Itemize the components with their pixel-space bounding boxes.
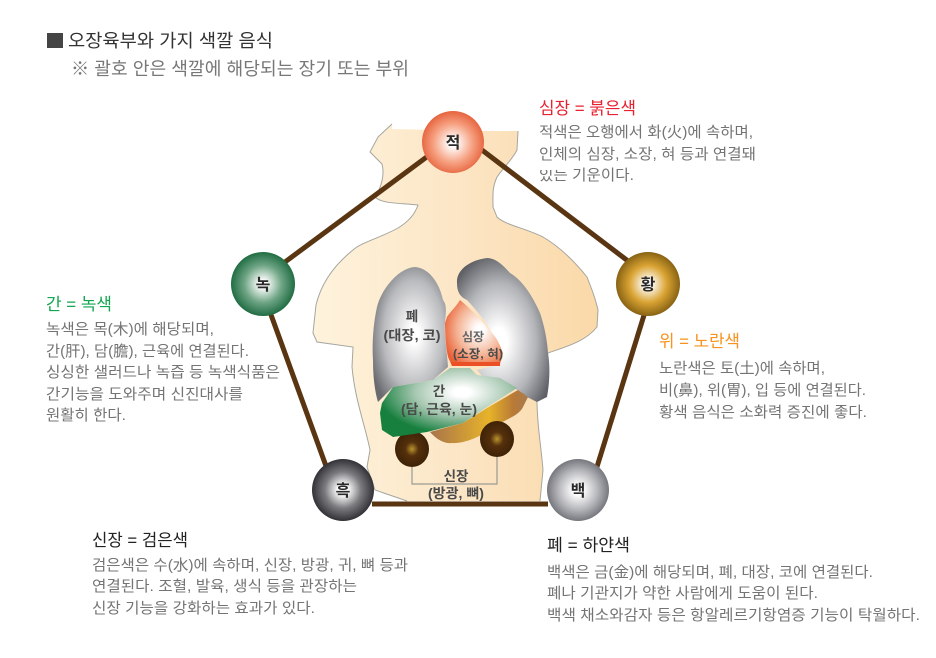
text block: liver green: 싱싱한 샐러드나 녹즙 등 녹색식품은 [46,364,280,381]
text block: lung white: 백색은 금(金)에 해당되며, 폐, 대장, 코에 연결된다. [547,564,873,581]
body silhouette [313,124,598,501]
kidney left [395,431,429,467]
text block: stomach yellow: 위 = 노란색 [659,332,740,351]
text block: kidney black: 연결된다. 조혈, 발육, 생식 등을 관장하는 [92,578,357,595]
text block: heart red: 인체의 심장, 소장, 혀 등과 연결돼 [539,146,756,163]
pentagon lines [270,147,645,504]
text block: stomach yellow: 비(鼻), 위(胃), 입 등에 연결된다. [659,382,866,399]
text block: heart red: 심장 = 붉은색 [539,99,636,118]
text block: kidney black: 신장 기능을 강화하는 효과가 있다. [92,600,315,617]
text block: liver green: 간(肝), 담(膽), 근육에 연결된다. [46,343,249,360]
text block: liver green: 간 = 녹색 [46,295,112,314]
text block: kidney black: 검은색은 수(水)에 속하며, 신장, 방광, 귀, 뼈 등과 [92,557,408,574]
text block: lung white: 백색 채소와감자 등은 항알레르기항염증 기능이 탁월하다. [547,607,920,624]
circle: black: 흑 [336,482,351,500]
text block: liver green: 간기능을 도와주며 신진대사를 [46,386,243,403]
text block: stomach yellow: 노란색은 토(土)에 속하며, [659,360,825,377]
organ labels: 신장 [444,469,469,484]
lung right [457,258,549,402]
text block: kidney black: 신장 = 검은색 [92,531,188,550]
organ labels: 폐 [406,309,418,324]
kidney connector [412,457,497,484]
kidney right [480,421,514,457]
lung left [373,267,448,402]
circle: red [422,111,484,173]
organ labels: (대장, 코) [384,328,440,343]
organ labels: (담, 근육, 눈) [401,402,477,417]
body illustration [313,124,598,501]
heart [445,300,503,366]
text block: heart red: 있는 기운이다. [539,167,634,184]
circle: green [231,252,295,316]
circle: yellow: 황 [641,276,656,294]
subtitle note: ※ 괄호 안은 색깔에 해당되는 장기 또는 부위 [71,59,409,79]
text block: liver green: 원활히 한다. [46,407,126,424]
circle: white [547,459,609,521]
text block: heart red [538,99,756,184]
circle: black [312,459,374,521]
title: 오장육부와 가지 색깔 음식 [68,31,273,51]
organ labels: (소장, 혀) [453,347,503,361]
organ labels: 심장 [462,330,484,344]
organ labels: 간 [433,384,446,399]
text block: lung white: 폐나 기관지가 약한 사람에게 도움이 된다. [547,585,818,602]
organ labels [384,309,503,501]
circle: red: 적 [446,134,460,152]
body outline [313,124,598,501]
circle: white: 백 [571,482,585,500]
text block: kidney black [92,531,408,617]
liver [380,368,517,437]
text block: liver green: 녹색은 목(木)에 해당되며, [46,321,214,338]
text block: lung white: 폐 = 하얀색 [547,536,630,555]
heart base [451,362,500,366]
text block: lung white [547,536,920,624]
organ labels: (방광, 뼈) [428,486,484,501]
text block: heart red: 적색은 오행에서 화(火)에 속하며, [539,124,753,141]
circle: yellow [616,252,680,316]
text block: stomach yellow [659,332,867,421]
text block: stomach yellow: 황색 음식은 소화력 증진에 좋다. [659,404,867,421]
circle: green: 녹 [256,276,271,294]
stomach [430,390,528,443]
text block: liver green [46,295,280,424]
